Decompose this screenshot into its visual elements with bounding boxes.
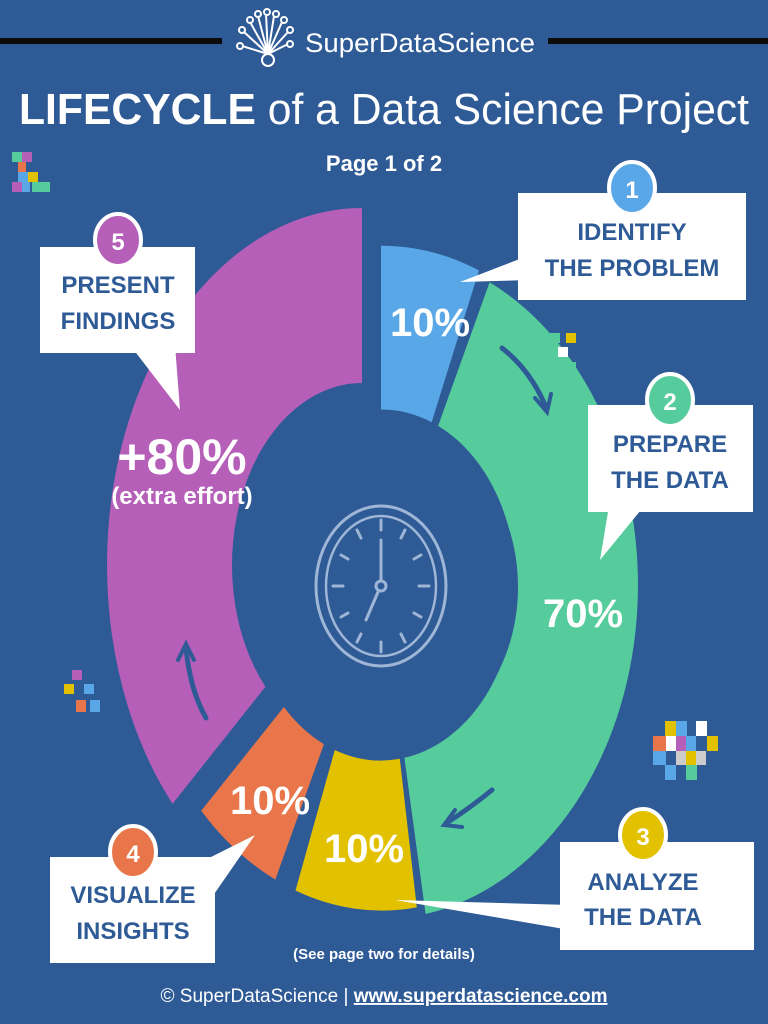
segment: analyze (yellow) [296, 750, 417, 911]
percent labels: 10% [324, 827, 404, 871]
segment: present (purple) [107, 208, 362, 804]
callout 3: ANALYZE [587, 869, 699, 896]
arrows [178, 348, 551, 827]
percent labels: +80% [117, 429, 247, 485]
segment: visualize (orange) [201, 707, 324, 880]
icon: clock [316, 506, 446, 666]
callout 4 [50, 826, 255, 963]
note: (See page two for details) [293, 946, 475, 963]
callout 3: 3 [636, 824, 650, 851]
callout 2 [588, 374, 753, 560]
percent labels: (extra effort) [111, 483, 253, 510]
callout 3 [395, 809, 754, 950]
callout 4: 4 [126, 841, 140, 868]
donut chart [107, 208, 638, 914]
callout 2: 2 [663, 389, 677, 416]
segment: prepare (green) [404, 282, 638, 914]
callout 1: THE PROBLEM [545, 255, 719, 282]
callout 4: VISUALIZE [70, 882, 196, 909]
subtitle: Page 1 of 2 [326, 151, 442, 176]
callout 5 [40, 214, 195, 410]
callout 5: 5 [111, 229, 125, 256]
callout 5: PRESENT [61, 272, 175, 299]
percent labels: 10% [230, 779, 310, 823]
callout 4: INSIGHTS [76, 918, 190, 945]
brand name: SuperDataScience [305, 28, 535, 58]
percent labels [111, 301, 623, 871]
percent labels: 10% [390, 301, 470, 345]
callout 3: THE DATA [584, 904, 702, 931]
callout 2: PREPARE [613, 431, 727, 458]
inner circle [248, 424, 518, 750]
callout 1 [460, 162, 746, 300]
callout 2: THE DATA [611, 467, 729, 494]
callout 1: 1 [625, 177, 639, 204]
percent labels: 70% [543, 592, 623, 636]
segment: identify (blue) [381, 246, 479, 422]
decorative pixels [12, 152, 718, 780]
icon: logo [237, 9, 293, 66]
callout 5: FINDINGS [61, 308, 175, 335]
header logo line [0, 38, 768, 44]
footer: © SuperDataScience | www.superdatascience.com [160, 986, 608, 1007]
title: LIFECYCLE of a Data Science Project [19, 85, 749, 134]
callout 1: IDENTIFY [577, 219, 687, 246]
